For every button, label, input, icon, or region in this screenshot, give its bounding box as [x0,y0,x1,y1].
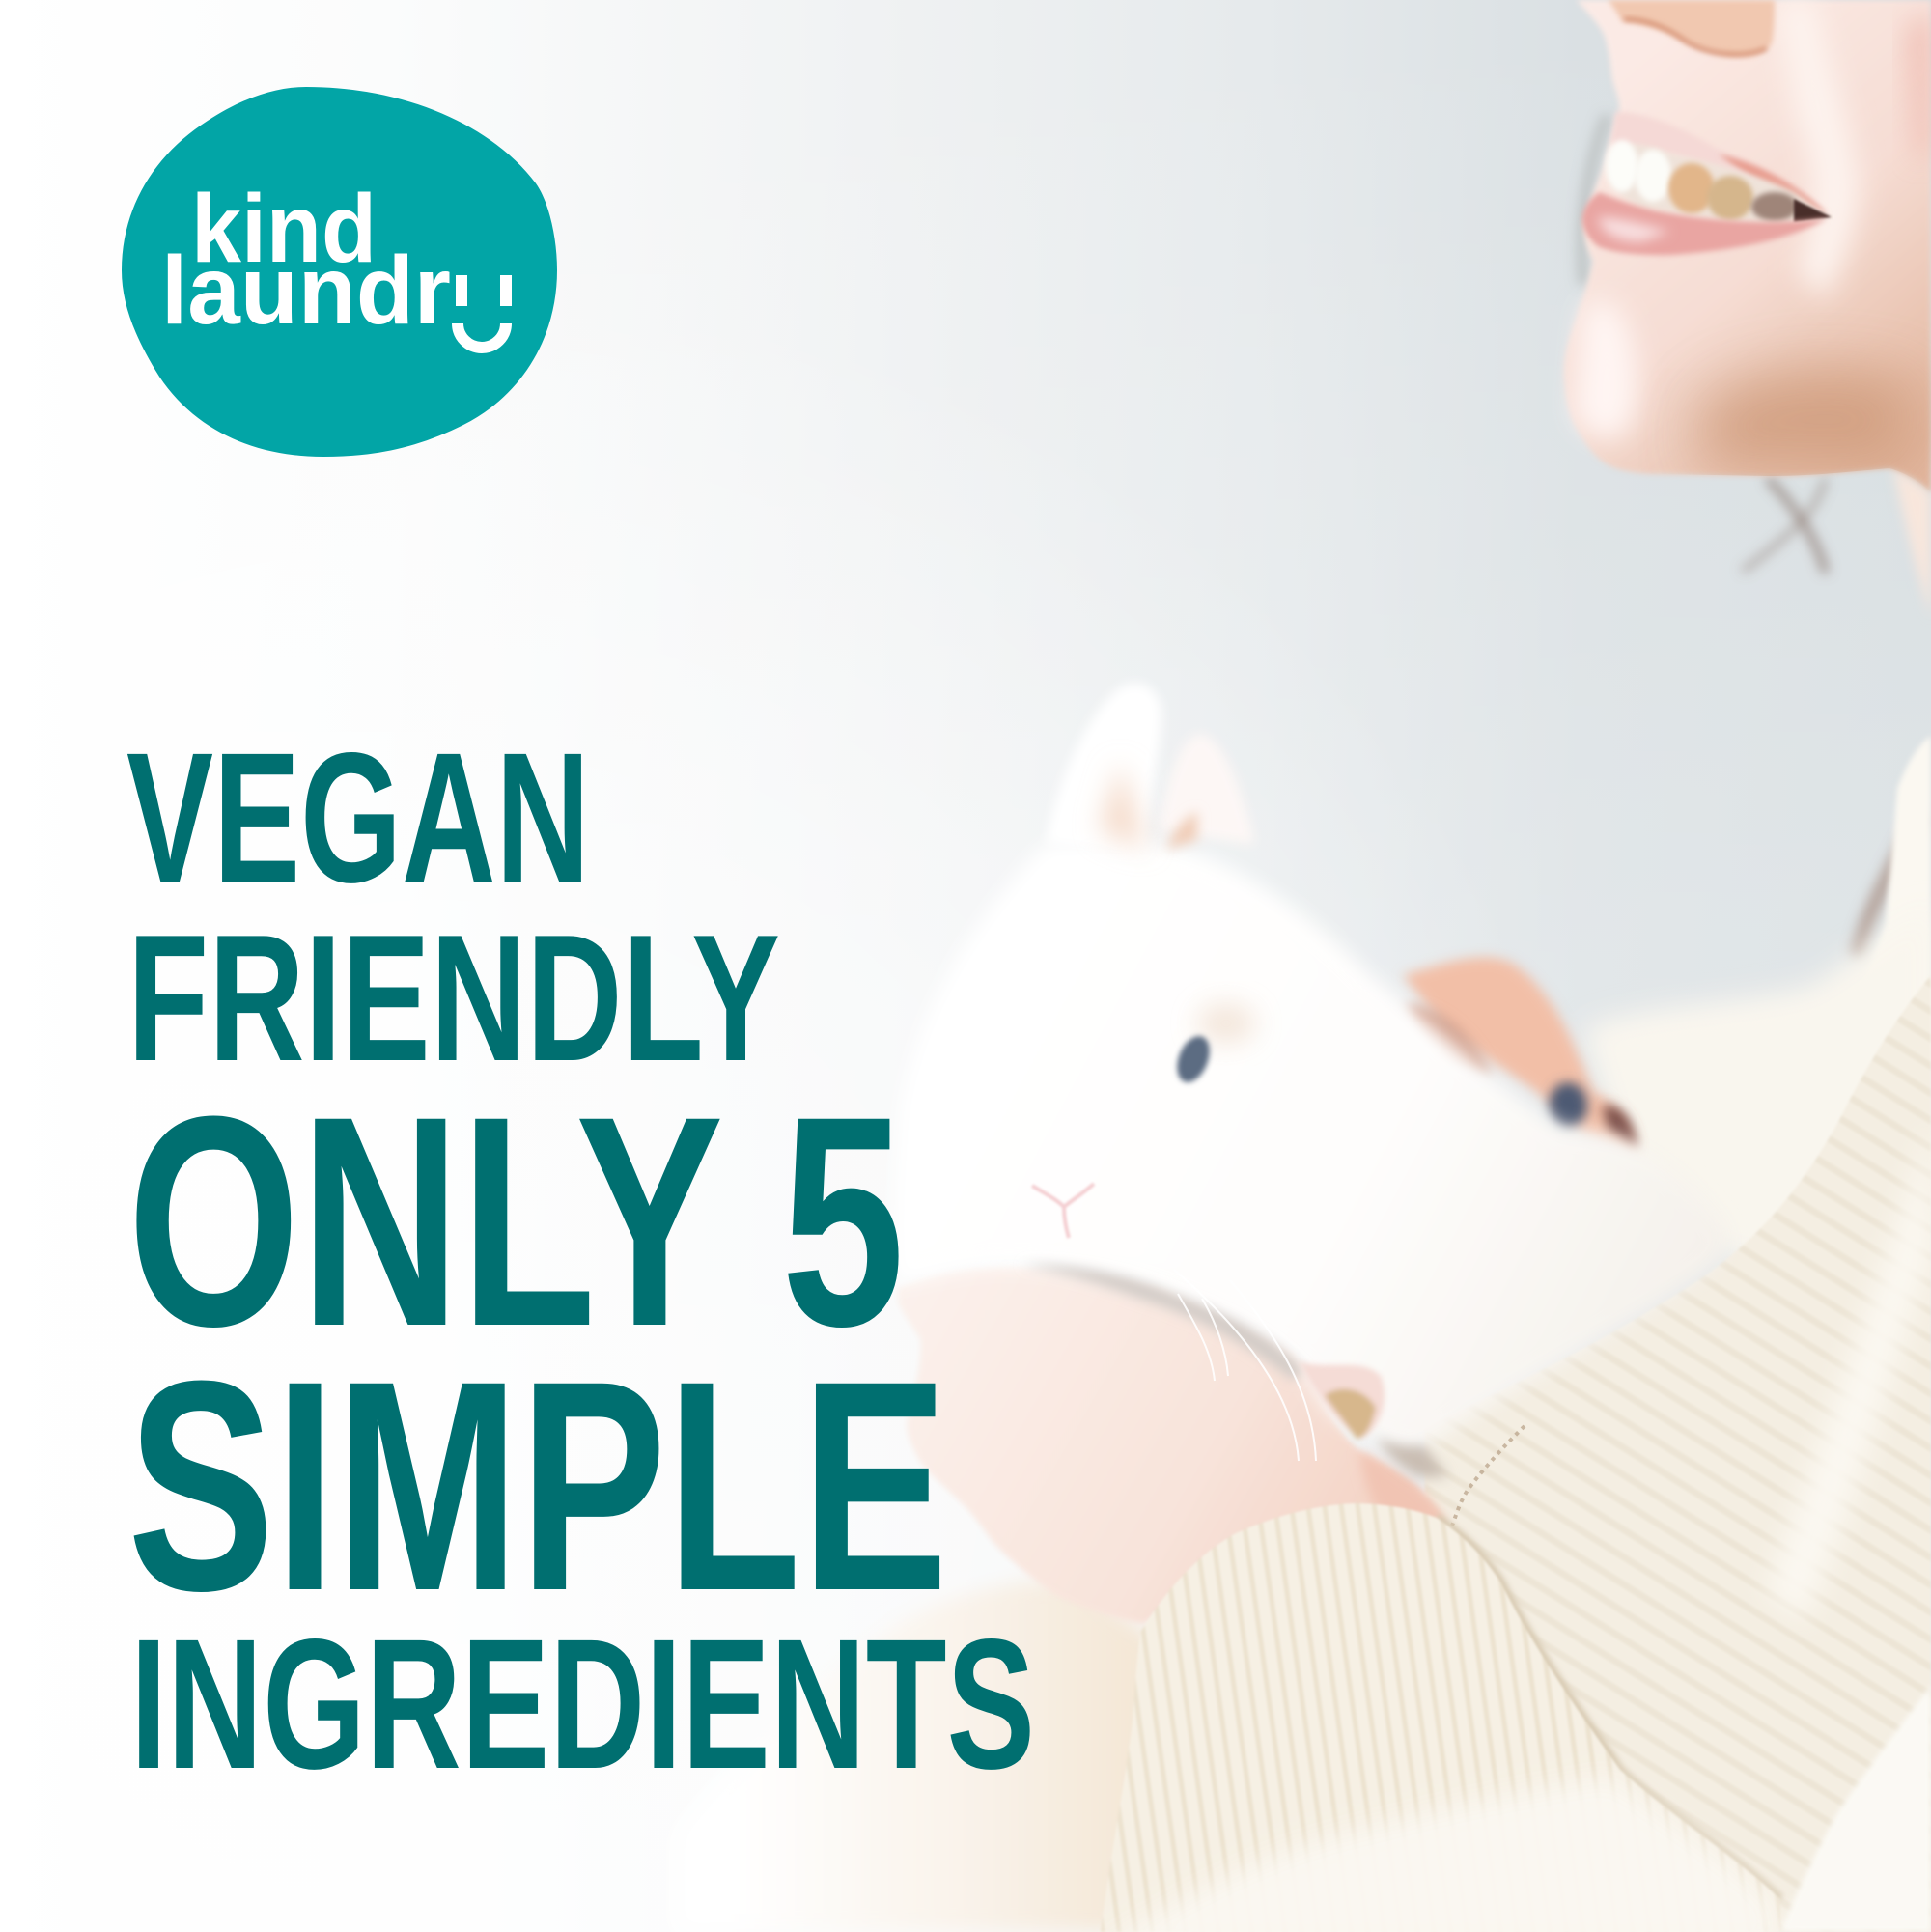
lower right arm [1780,1685,1931,1932]
collar and back sweater [1583,736,1931,1274]
shadow under rabbit [1377,1439,1448,1477]
sweater sleeve and cuff [1101,1503,1780,1932]
logo smile y [456,275,512,348]
rabbit face shading [1197,1004,1255,1043]
photo: woman holding a white rabbit [860,0,1931,1932]
rabbit ears [1046,684,1255,854]
rabbit eye [1171,1031,1216,1087]
thumb shade [1359,1450,1445,1525]
whiskers [1174,1270,1316,1461]
lower lip [1582,192,1828,255]
rabbit [894,684,1727,1477]
logo wordmark: kind [191,175,377,283]
nose [1608,0,1775,56]
upper lip [1610,112,1828,214]
logo blob [122,87,557,457]
upper fingers [1403,957,1637,1151]
headline: ingredients: INGREDIENTS [130,1600,1035,1807]
sweater torso [1424,975,1931,1932]
headline: vegan: VEGAN [126,714,590,921]
rabbit mouth shadow [1021,1265,1303,1381]
headline: simple: SIMPLE [127,1318,948,1653]
headline [126,714,1035,1807]
headline: only 5: ONLY 5 [127,1053,905,1388]
mouth and teeth [1582,140,1832,255]
headline: friendly: FRIENDLY [127,897,780,1099]
rabbit body [894,840,1727,1450]
rabbit nose [1032,1184,1094,1238]
hair strands behind neck [1582,120,1917,951]
face and neck [1564,0,1931,492]
logo smile y: y [467,307,477,328]
logo wordmark second line: laundr [161,237,451,345]
lower left sweater [676,1580,1159,1932]
neck below jaw [1892,463,1931,618]
hand supporting rabbit [898,1266,1445,1624]
rabbit paw [1299,1361,1385,1439]
torso stitch line [1452,1426,1525,1526]
logo: kind laundry [122,87,557,457]
